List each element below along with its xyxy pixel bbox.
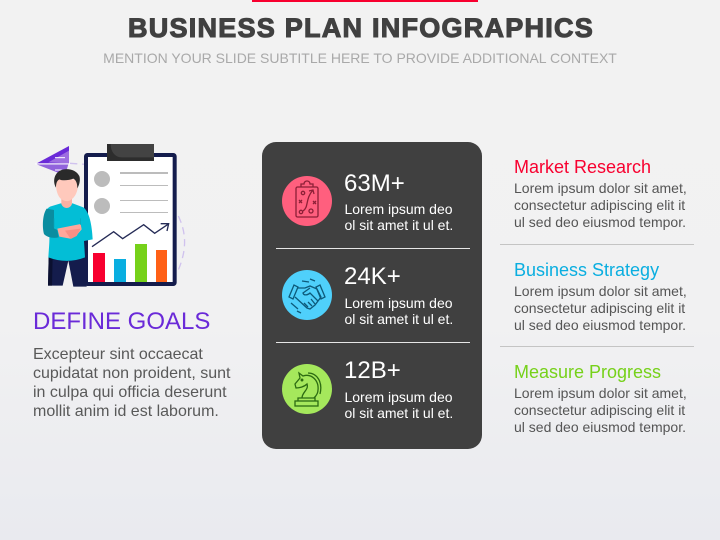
text: consectetur adipiscing elit it (514, 402, 685, 418)
text (514, 385, 687, 435)
text: ul sed deo eiusmod tempor. (514, 419, 686, 435)
block: business strategy (514, 260, 687, 333)
divider (276, 342, 470, 343)
torso (44, 203, 93, 261)
text: Lorem ipsum dolor sit amet, (514, 385, 687, 401)
shaded sleeve (43, 209, 59, 238)
stat: 24K+ (282, 263, 453, 327)
text block: define goals description: in culpa qui officia deserunt (33, 384, 227, 401)
value: 63M+ (344, 170, 405, 197)
divider (276, 248, 470, 249)
text block: define goals description: Excepteur sint occaecat (33, 346, 203, 363)
description: ol sit amet it ul et. (344, 217, 453, 233)
icon: handshake (282, 270, 332, 320)
description: Lorem ipsum deo (344, 389, 453, 405)
legs (48, 257, 87, 287)
text: consectetur adipiscing elit it (514, 300, 685, 316)
person (43, 169, 93, 287)
face (56, 179, 78, 201)
text (514, 180, 687, 230)
icon: paper plane (35, 146, 70, 175)
bar chart (93, 244, 167, 282)
text block: define goals description: mollit anim id est laborum. (33, 403, 219, 420)
neck (61, 193, 72, 208)
title: BUSINESS PLAN INFOGRAPHICS (128, 13, 594, 43)
subtitle: MENTION YOUR SLIDE SUBTITLE HERE TO PROVIDE ADDITIONAL CONTEXT (103, 50, 617, 66)
text: ul sed deo eiusmod tempor. (514, 214, 686, 230)
top accent bar (252, 0, 478, 2)
text: consectetur adipiscing elit it (514, 197, 685, 213)
divider (500, 244, 694, 245)
value: 12B+ (344, 357, 401, 384)
heading: Market Research (514, 157, 651, 177)
clipboard (86, 144, 175, 284)
panel: dark stats (262, 142, 482, 449)
icon: chess knight (282, 364, 332, 414)
illustration: person with clipboard chart (35, 144, 186, 287)
stat: 63M+ (282, 170, 453, 233)
description (344, 389, 453, 421)
description: Lorem ipsum deo (344, 295, 453, 311)
heading: Measure Progress (514, 362, 661, 382)
description: Lorem ipsum deo (344, 201, 453, 217)
hair (54, 169, 80, 188)
trend arrow (92, 224, 169, 247)
text (514, 283, 687, 333)
block: measure progress (514, 362, 687, 435)
text block: define goals description (33, 346, 230, 420)
dashed orbit (70, 163, 185, 270)
divider (500, 346, 694, 347)
block: market research (514, 157, 687, 230)
text block: define goals description: cupidatat non proident, sunt (33, 365, 230, 382)
description (344, 295, 453, 327)
stat: 12B+ (282, 357, 453, 421)
icon: strategy clipboard (282, 176, 332, 226)
description: ol sit amet it ul et. (344, 405, 453, 421)
heading: Business Strategy (514, 260, 659, 280)
value: 24K+ (344, 263, 401, 290)
text: Lorem ipsum dolor sit amet, (514, 180, 687, 196)
description (344, 201, 453, 233)
crossed arms (57, 224, 82, 239)
heading: define goals: DEFINE GOALS (33, 308, 210, 335)
text: ul sed deo eiusmod tempor. (514, 317, 686, 333)
description: ol sit amet it ul et. (344, 311, 453, 327)
text: Lorem ipsum dolor sit amet, (514, 283, 687, 299)
